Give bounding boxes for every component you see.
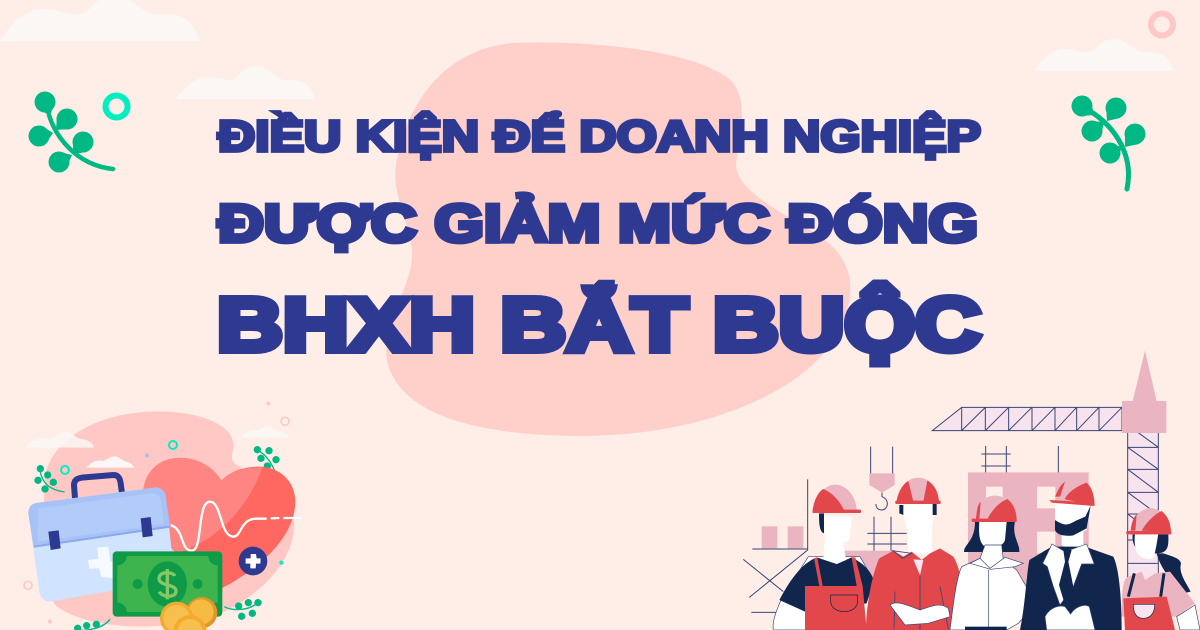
- pink blob: [44, 412, 294, 627]
- worker 3: [950, 496, 1036, 630]
- icon: medical case: [28, 475, 175, 602]
- crane: [932, 351, 1166, 592]
- leaves: [34, 446, 280, 630]
- ring pink: [1151, 14, 1173, 36]
- icon: leaf branch left: [28, 92, 113, 172]
- worker 1: [773, 485, 874, 630]
- icon: coins: [160, 597, 217, 630]
- illustration: construction workers: [743, 351, 1200, 630]
- illustration: health and money: [24, 402, 302, 630]
- icon: heart: [143, 458, 302, 588]
- background blob: [386, 42, 850, 436]
- ring teal: [106, 96, 128, 118]
- worker 5: [1122, 508, 1200, 630]
- icon: plus badge: [239, 547, 267, 575]
- worker 4: [1020, 477, 1122, 630]
- cloud upper middle: [176, 66, 315, 99]
- building and scaffolding: [743, 446, 1089, 612]
- cloud top left: [0, 0, 199, 41]
- title line 3: BHXH BẮT BUỘC: [217, 282, 981, 366]
- title: [217, 110, 981, 366]
- title line 1: ĐIỀU KIỆN ĐỂ DOANH NGHIỆP: [218, 110, 981, 161]
- icon: banknote: [113, 551, 222, 617]
- worker 2: [866, 478, 967, 630]
- title line 2: ĐƯỢC GIẢM MỨC ĐÓNG: [218, 194, 978, 254]
- clouds: [25, 431, 94, 448]
- icon: leaf branch right: [1072, 96, 1146, 189]
- dots and rings: [169, 441, 177, 449]
- cloud top right: [1034, 39, 1173, 71]
